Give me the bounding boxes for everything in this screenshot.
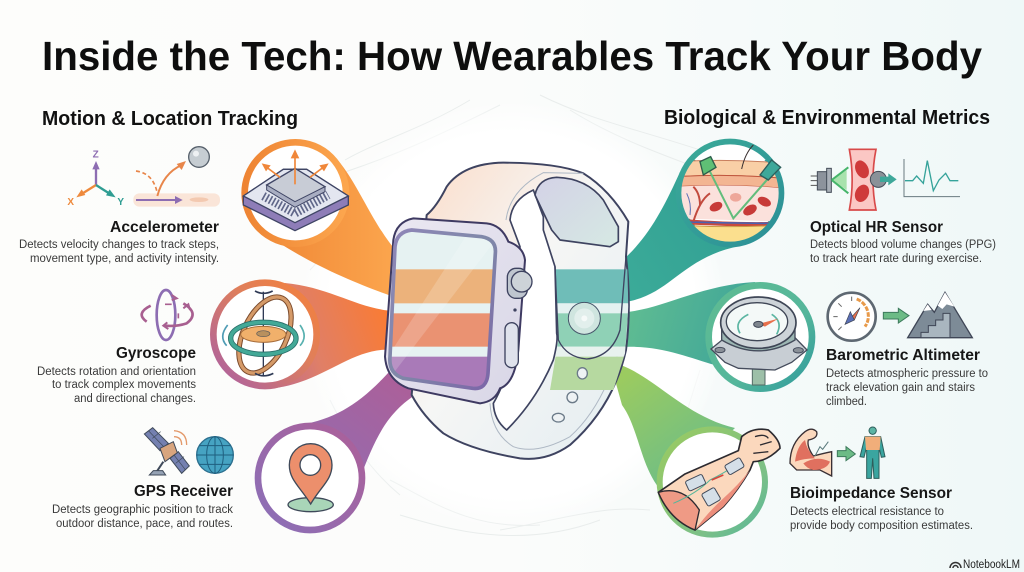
side button (505, 323, 518, 368)
text block: bioimpedance sensor (790, 485, 973, 532)
icon: satellite and globe (144, 428, 233, 475)
text block: accelerometer: Accelerometer (110, 219, 219, 236)
sensor circle: GPS pin (258, 426, 362, 530)
strap pin button (568, 302, 600, 334)
ribbon: GPS (300, 362, 415, 478)
digital crown (507, 268, 532, 298)
sensor circle: gyroscope (213, 283, 317, 386)
sensor circle: accelerometer chip (243, 142, 348, 244)
text block: barometric altimeter: Barometric Altimeter (826, 347, 980, 364)
central smartwatch illustration (383, 163, 630, 459)
text block: accelerometer: Detects velocity changes to track steps, (19, 239, 219, 251)
text block: gyroscope: Gyroscope (116, 345, 196, 362)
text block: optical HR sensor: Optical HR Sensor (810, 219, 943, 236)
strap colour bands (543, 269, 630, 390)
text block: bioimpedance sensor: Detects electrical resistance to (790, 506, 944, 518)
faint contour lines (310, 95, 700, 536)
screen border (390, 230, 495, 388)
strap translucent edge lines (490, 173, 620, 449)
icon: XYZ axes and bouncing ball: Z (93, 150, 99, 161)
icon: XYZ axes and bouncing ball (67, 147, 220, 208)
title: Inside the Tech: How Wearables Track Your Body (42, 33, 982, 79)
text block: optical HR sensor: to track heart rate during exercise. (810, 253, 982, 265)
text block: barometric altimeter: track elevation gain and stairs (826, 382, 975, 394)
watch case (385, 218, 525, 403)
ribbon: accelerometer (250, 145, 397, 298)
text block: gyroscope (37, 345, 196, 405)
text block: bioimpedance sensor: Bioimpedance Sensor (790, 485, 952, 502)
icon: gauge, arrow, mountain with stairs (828, 292, 972, 341)
text block: GPS receiver (52, 483, 233, 530)
strap tongue outline (555, 257, 626, 359)
ribbon: optical HR (625, 172, 735, 302)
text block: bioimpedance sensor: provide body composition estimates. (790, 520, 973, 532)
text block: gyroscope: to track complex movements (52, 379, 196, 391)
section heading: biological and environmental: Biological & Environmental Metrics (664, 107, 990, 129)
icon: light, blood vessel and pulse chart (811, 149, 960, 210)
text block: barometric altimeter: climbed. (826, 396, 867, 408)
text block: gyroscope: and directional changes. (74, 393, 196, 405)
text block: GPS receiver: GPS Receiver (134, 483, 233, 500)
text block: GPS receiver: outdoor distance, pace, and routes. (56, 518, 233, 530)
white glow behind watch (298, 100, 728, 530)
sensor dot (513, 308, 517, 312)
ribbon: gyroscope (262, 283, 395, 389)
text block: barometric altimeter: Detects atmospheric pressure to (826, 368, 988, 380)
strap inner opening (493, 190, 557, 430)
text block: gyroscope: Detects rotation and orientation (37, 366, 196, 378)
ribbon: bioimpedance (610, 362, 735, 495)
sensor circle: barometric pressure gauge (709, 285, 812, 389)
text block: optical HR sensor: Detects blood volume changes (PPG) (810, 239, 996, 251)
text block: optical HR sensor (810, 219, 996, 265)
watch strap (412, 163, 629, 459)
section heading: motion and location: Motion & Location Tracking (42, 108, 298, 130)
sensor circle: forearm with electrodes (658, 429, 780, 535)
icon: XYZ axes and bouncing ball: Y (117, 197, 124, 208)
icon: XYZ axes and bouncing ball: X (67, 197, 74, 208)
text block: GPS receiver: Detects geographic position to track (52, 504, 233, 516)
sensor circle: optical HR skin cross-section (677, 140, 783, 247)
icon: gyroscope rotation axes (142, 290, 193, 340)
strap holes (552, 368, 587, 422)
text block: barometric altimeter (826, 347, 988, 408)
text block: accelerometer: movement type, and activity intensity. (30, 253, 219, 265)
strap keeper loop (535, 177, 618, 247)
watch screen (392, 232, 494, 387)
ribbon: barometric (625, 282, 755, 365)
icon: muscle, arrow, body figure (790, 427, 885, 478)
text block: accelerometer (19, 219, 219, 265)
